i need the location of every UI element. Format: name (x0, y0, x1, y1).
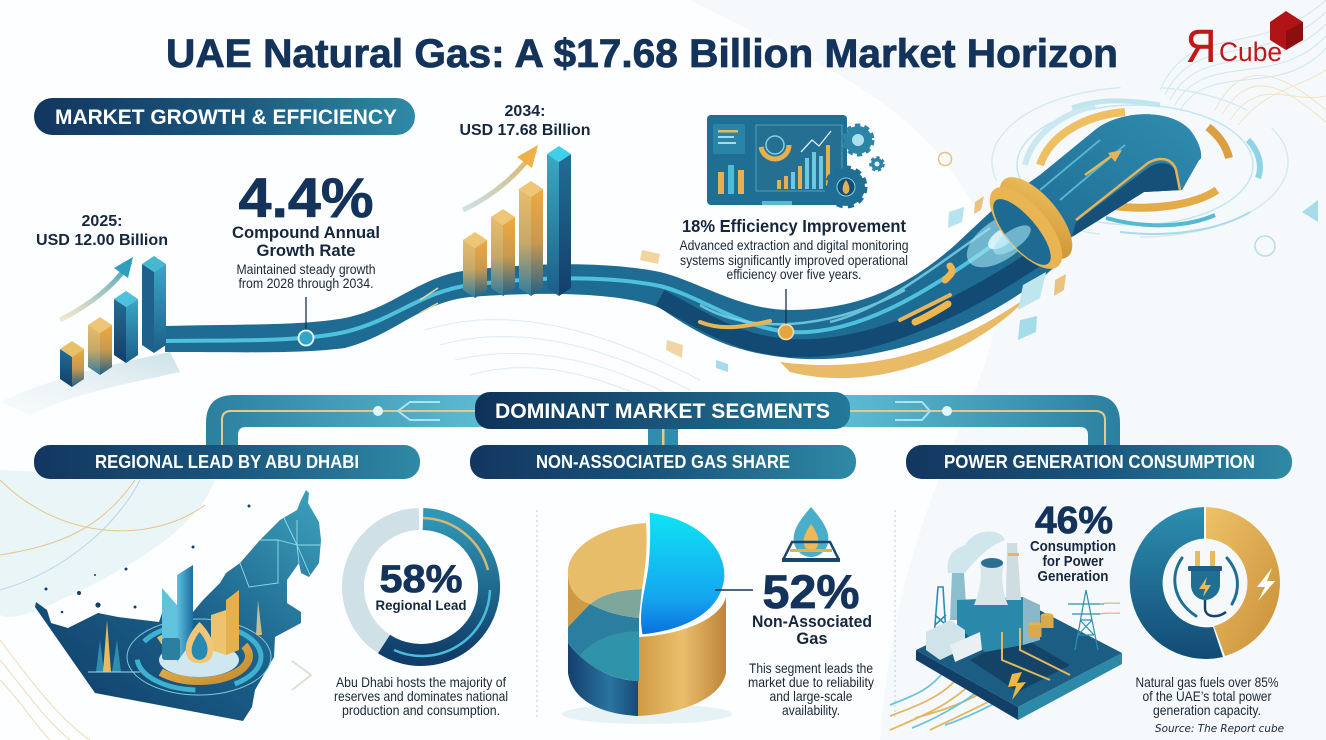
stat: efficiency improvement: efficiency over five years. (726, 266, 862, 282)
illustration: power plant (890, 532, 1122, 730)
stat: compound annual growth rate (232, 166, 380, 291)
text: regional description: production and consumption. (342, 702, 500, 718)
heading: power generation (906, 445, 1292, 479)
text: non-associated description: market due to reliability (748, 674, 874, 690)
stat: 52 percent non-associated gas: 52% (762, 565, 860, 618)
stat: efficiency improvement: Advanced extraction and digital monitoring (680, 237, 908, 253)
text: power description: Natural gas fuels over 85% (1136, 674, 1278, 690)
heading: regional lead: REGIONAL LEAD BY ABU DHABI (95, 452, 359, 472)
source note: Source: The Report cube (1155, 722, 1284, 735)
stat: 46 percent consumption: for Power (1042, 553, 1104, 570)
stat: efficiency improvement: 18% Efficiency Improvement (682, 216, 906, 236)
stat: compound annual growth rate: 4.4% (238, 166, 374, 229)
stat: 52 percent non-associated gas: Non-Associated (752, 613, 872, 631)
label: 2025 value: USD 12.00 Billion (36, 232, 168, 249)
heading: dominant market segments: DOMINANT MARKET SEGMENTS (495, 400, 830, 423)
text: non-associated description: This segment leads the (749, 660, 873, 676)
text: power description: generation capacity. (1153, 702, 1261, 718)
label: 2034 value: USD 17.68 Billion (460, 122, 590, 139)
heading: market growth and efficiency (34, 98, 415, 135)
bar chart: 2034 (463, 145, 571, 298)
stat: 46 percent consumption: Consumption (1030, 538, 1116, 555)
text: non-associated description: availability. (782, 702, 840, 718)
heading: regional lead (34, 445, 420, 479)
donut chart: 58 percent (353, 518, 490, 656)
marker: efficiency (778, 289, 794, 340)
label: 2025 value (36, 213, 168, 249)
text: non-associated description: and large-scale (770, 688, 853, 704)
stat: efficiency improvement: systems significantly improved operational (680, 252, 908, 268)
connector bridge (206, 395, 1120, 445)
pipeline flow (165, 114, 1201, 359)
bar chart: 2025 (60, 256, 166, 387)
gold ribbon under pipe (780, 295, 1030, 378)
stat: 52 percent non-associated gas: Gas (796, 630, 828, 648)
text: non-associated description (748, 660, 874, 718)
stat: compound annual growth rate: from 2028 through 2034. (238, 275, 374, 291)
text: regional description (334, 674, 508, 718)
title: UAE Natural Gas: A $17.68 Billion Market Horizon (166, 32, 1118, 76)
stat: compound annual growth rate: Maintained steady growth (236, 261, 376, 277)
donut chart: 58 percent: 58% (380, 558, 462, 601)
label: 2034 value (460, 103, 590, 139)
text: power description: of the UAE’s total power (1142, 688, 1272, 704)
stat: compound annual growth rate: Growth Rate (256, 242, 356, 260)
donut chart: 58 percent: Regional Lead (376, 597, 466, 613)
stat: 46 percent consumption: Generation (1038, 568, 1108, 585)
label: 2034 value: 2034: (505, 103, 545, 120)
panel dividers (537, 510, 895, 720)
text: power description (1136, 674, 1278, 718)
rings around pipe bend (938, 87, 1318, 256)
stat: 52 percent non-associated gas (752, 565, 872, 648)
label: 2025 value: 2025: (82, 213, 122, 230)
heading: non-associated gas (470, 445, 856, 479)
stat: 46 percent consumption (1030, 500, 1116, 585)
stat: efficiency improvement (680, 216, 908, 282)
text: regional description: Abu Dhabi hosts the majority of (336, 674, 506, 690)
marker: CAGR (298, 297, 314, 346)
heading: market growth and efficiency: MARKET GROWTH & EFFICIENCY (55, 106, 397, 129)
logo: RCube: Я (1186, 20, 1216, 72)
heading: non-associated gas: NON-ASSOCIATED GAS SHARE (536, 452, 790, 472)
stat: 46 percent consumption: 46% (1035, 500, 1113, 542)
chart: 3D cylinder 52 percent (562, 512, 753, 724)
heading: power generation: POWER GENERATION CONSUMPTION (944, 452, 1255, 472)
stat: compound annual growth rate: Compound Annual (232, 224, 380, 242)
logo: RCube (1186, 11, 1303, 72)
donut chart: 46 percent with plug (1130, 507, 1280, 659)
pale flow chips (640, 196, 1066, 372)
panel: regional map of UAE (35, 490, 321, 721)
logo: RCube: Cube (1219, 37, 1282, 67)
heading: dominant market segments (475, 392, 850, 429)
icon: monitoring dashboard with gears (707, 115, 883, 206)
text: regional description: reserves and dominates national (334, 688, 508, 704)
icon: gas flame (782, 507, 840, 562)
